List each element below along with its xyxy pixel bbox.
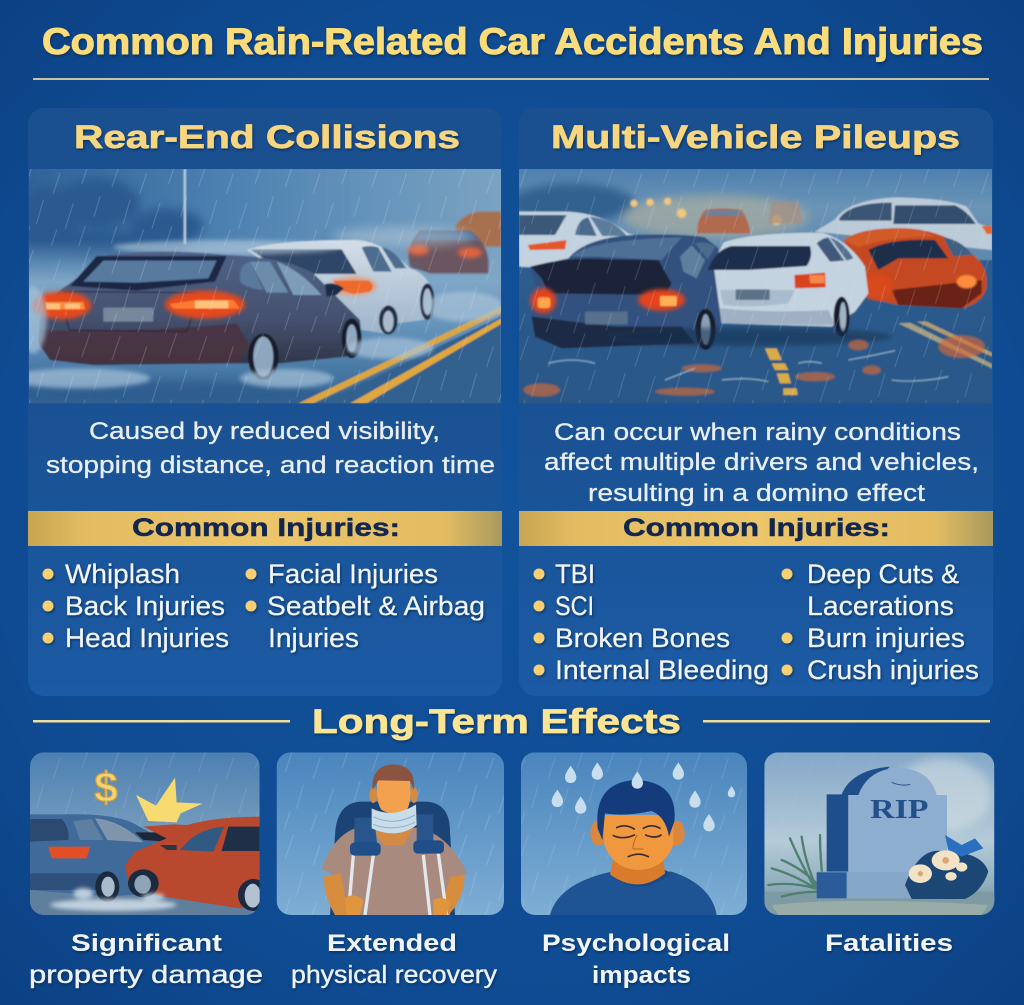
bullet list: injuries: Head Injuries <box>65 623 229 653</box>
description text: stopping distance, and reaction time <box>46 452 495 479</box>
front car <box>38 252 362 365</box>
label: extended physical recovery: Extended <box>327 930 457 957</box>
silver car <box>713 233 868 327</box>
bullet list: injuries: TBI <box>555 559 595 589</box>
white suv right <box>815 197 992 250</box>
heading: multi-vehicle pileups: Multi-Vehicle Pileups <box>551 119 960 155</box>
illustration: sad person under raindrops <box>521 752 747 915</box>
description text <box>46 418 495 479</box>
heading: rear-end collisions: Rear-End Collisions <box>74 119 460 155</box>
label: significant property damage <box>29 930 263 989</box>
distant cars <box>697 208 750 233</box>
bullet list: injuries: Crush injuries <box>807 655 979 685</box>
card: psychological impacts <box>521 752 747 989</box>
card: fatalities <box>764 752 994 957</box>
description text <box>544 419 979 507</box>
banner: common injuries <box>28 511 502 546</box>
label: psychological impacts: Psychological <box>542 930 730 957</box>
dark blue car <box>530 235 722 350</box>
panel: multi-vehicle pileups <box>508 108 995 696</box>
bullet list: injuries: Burn injuries <box>807 623 965 653</box>
panel: rear-end collisions <box>3 108 503 696</box>
illustration: injured man on crutches <box>277 752 504 915</box>
illustration: rear-end collision in rain <box>3 167 503 408</box>
white car <box>247 240 433 333</box>
bullet list: injuries <box>42 559 485 653</box>
road shadow <box>605 327 892 346</box>
bullet list: injuries: SCI <box>555 591 594 621</box>
label: psychological impacts: impacts <box>592 962 691 989</box>
card: physical recovery <box>277 752 504 989</box>
bullet list: injuries: Deep Cuts & <box>807 559 959 589</box>
label: psychological impacts <box>542 930 730 989</box>
bullet list: injuries: Whiplash <box>65 559 180 589</box>
bullet list: injuries: Facial Injuries <box>268 559 438 589</box>
haze over roofs <box>113 240 340 255</box>
banner: common injuries <box>519 511 993 546</box>
bullet list: injuries: Injuries <box>268 623 359 653</box>
banner: common injuries: Common Injuries: <box>132 514 400 542</box>
red car <box>843 228 987 308</box>
bullet list: injuries: Back Injuries <box>65 591 225 621</box>
bullet list: injuries: Internal Bleeding <box>555 655 769 685</box>
banner: common injuries: Common Injuries: <box>623 514 890 542</box>
illustration: RIP gravestone with flowers: RIP <box>870 794 928 824</box>
description text: Can occur when rainy conditions <box>554 419 961 446</box>
description text: resulting in a domino effect <box>588 480 925 507</box>
description text: affect multiple drivers and vehicles, <box>544 449 979 476</box>
bullet list: injuries: Lacerations <box>807 591 954 621</box>
spray <box>10 287 503 388</box>
bullet list: injuries <box>534 559 979 685</box>
bullet list: injuries: Seatbelt & Airbag <box>267 591 485 621</box>
label: extended physical recovery: physical recovery <box>291 961 498 989</box>
illustration: two crashed cars with dollar sign <box>30 752 269 915</box>
bullet list: injuries: Broken Bones <box>555 623 730 653</box>
illustration: RIP gravestone with flowers <box>764 752 994 915</box>
icon: dollar sign: $ <box>94 764 118 812</box>
label: fatalities: Fatalities <box>825 930 953 957</box>
road marks <box>765 348 798 395</box>
title: Common Rain-Related Car Accidents And Injuries <box>42 21 983 62</box>
description text: Caused by reduced visibility, <box>89 418 440 445</box>
label: significant property damage: property damage <box>29 961 263 989</box>
heading: long-term effects: Long-Term Effects <box>312 703 681 741</box>
label: extended physical recovery <box>291 930 498 989</box>
white car left <box>519 212 635 273</box>
label: significant property damage: Significant <box>71 930 222 957</box>
far cars <box>455 212 501 247</box>
illustration: multi-car pileup in rain <box>508 167 995 407</box>
card: property damage <box>29 752 269 989</box>
